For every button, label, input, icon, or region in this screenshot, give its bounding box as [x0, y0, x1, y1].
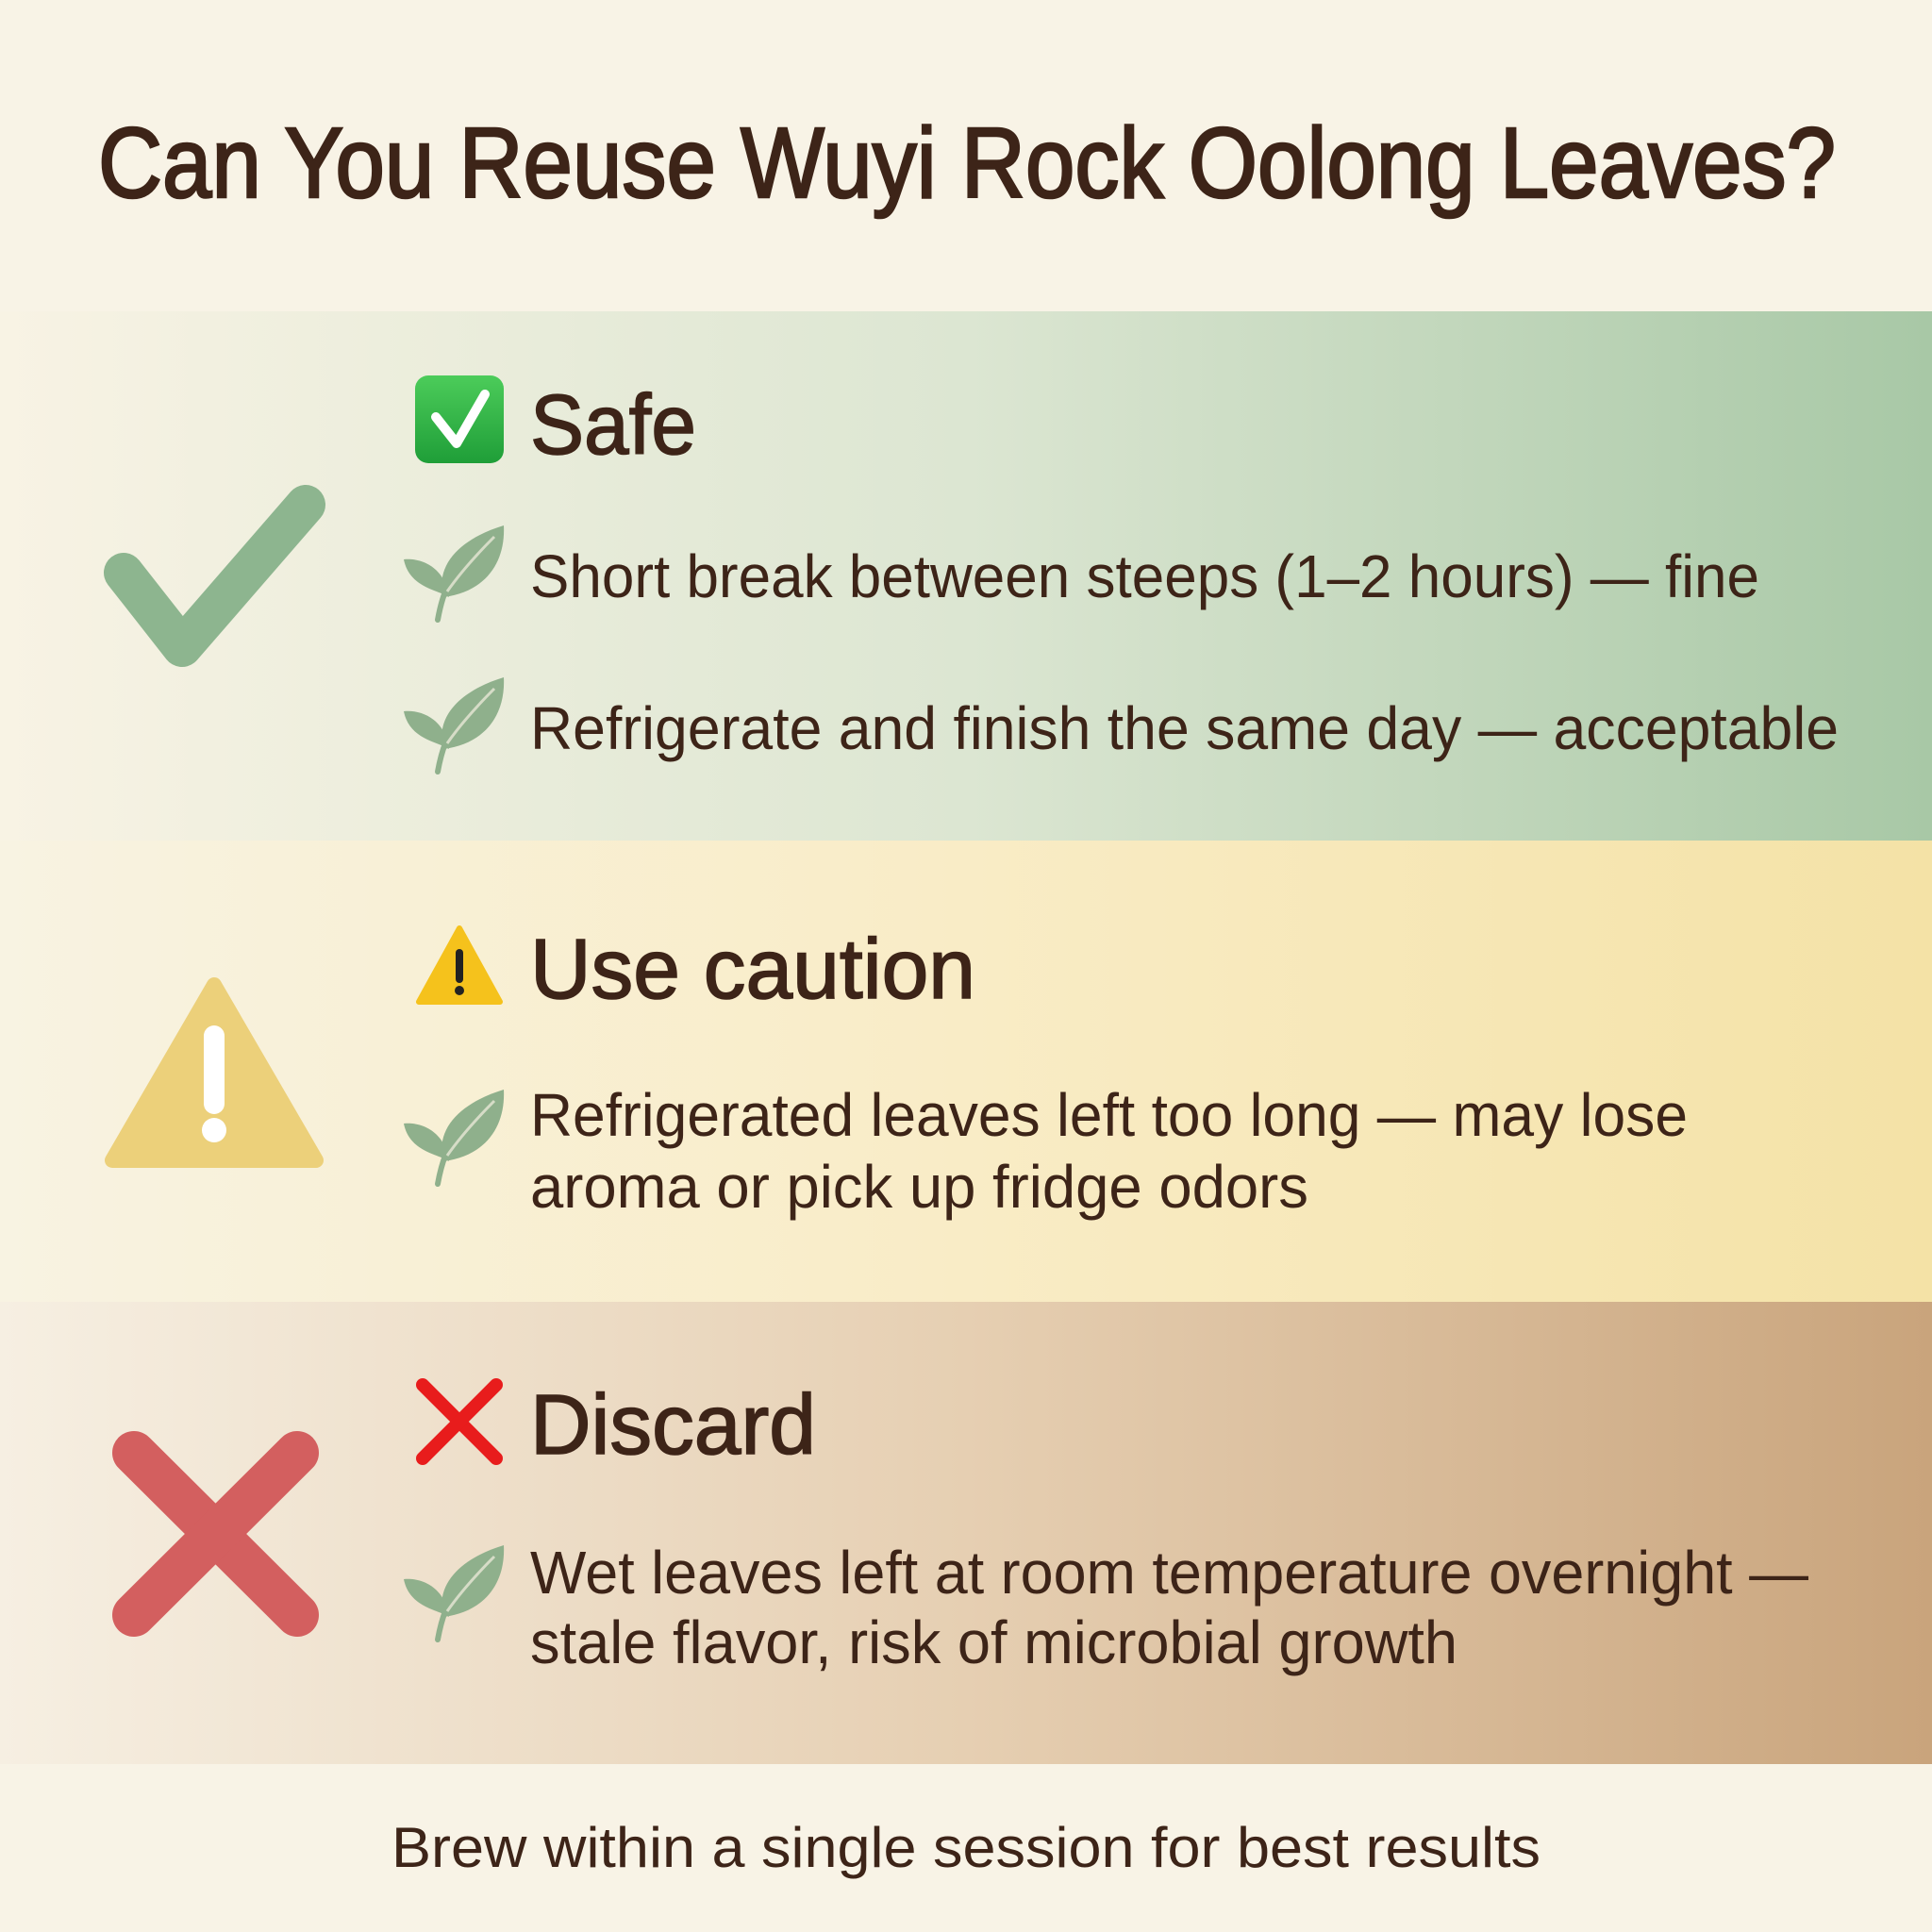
icon: small x [423, 1385, 496, 1458]
panel: caution [0, 841, 1932, 1302]
item: refrigerate: Refrigerate and finish the same day — acceptable [530, 694, 1839, 762]
icon: big warning [112, 985, 316, 1160]
item: wet leaves [404, 1539, 1808, 1676]
icon: small warning [419, 928, 500, 1002]
icon: big check [124, 505, 306, 647]
panel: discard [0, 1302, 1932, 1764]
heading: discard: Discard [530, 1378, 816, 1473]
panel: safe [0, 311, 1932, 841]
item: short break [404, 525, 1759, 620]
heading: safe: Safe [530, 378, 696, 473]
item: refrigerated too long: Refrigerated leaves left too long — may lose [530, 1081, 1688, 1149]
item: refrigerated too long: aroma or pick up fridge odors [530, 1153, 1308, 1221]
footer note: Brew within a single session for best results [391, 1816, 1541, 1879]
icon: big x [134, 1453, 297, 1615]
item: refrigerate [404, 677, 1839, 772]
heading: caution: Use caution [530, 923, 975, 1017]
item: wet leaves: stale flavor, risk of microbial growth [530, 1608, 1457, 1676]
item: wet leaves: Wet leaves left at room temperature overnight — [530, 1539, 1808, 1607]
item: short break: Short break between steeps (1–2 hours) — fine [530, 542, 1759, 610]
item: refrigerated too long [404, 1081, 1688, 1221]
icon: small check box [415, 375, 504, 463]
